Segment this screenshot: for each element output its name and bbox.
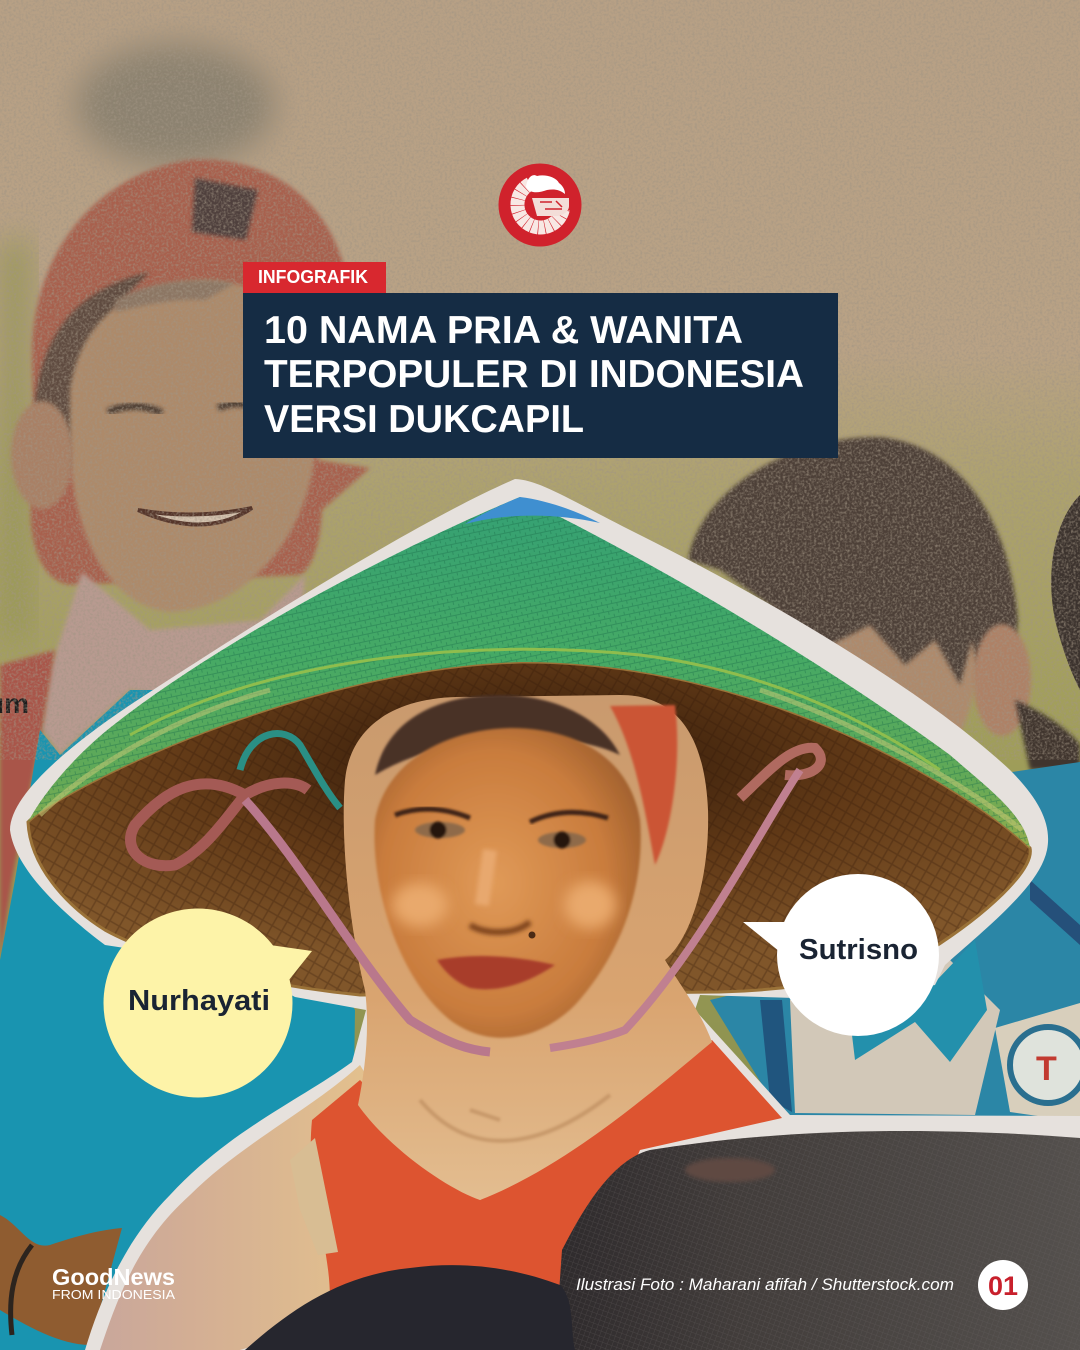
woman: eyebrows bbox=[395, 809, 608, 822]
boy: blue uniform bbox=[0, 690, 355, 1350]
boy: ear bbox=[11, 401, 73, 509]
woman: hat weave texture bbox=[20, 490, 1040, 860]
woman: lace cap bbox=[375, 695, 620, 775]
brand: GoodNews from Indonesia bbox=[52, 1264, 176, 1302]
woman bbox=[20, 490, 1040, 1350]
logo: ring forming letter G bbox=[517, 184, 563, 227]
woman: scarf neck folds bbox=[420, 1095, 610, 1141]
woman: headscarf bbox=[344, 695, 712, 1200]
boy: eyes bbox=[108, 403, 262, 413]
ribbon string right bbox=[550, 770, 800, 1048]
girl: dark strap upper right bbox=[1030, 880, 1080, 945]
logo: G bar pattern bbox=[540, 201, 562, 209]
burlap sack foreground bbox=[245, 1131, 1080, 1350]
speech bubble: Sutrisno bbox=[743, 874, 939, 1036]
logo bbox=[498, 164, 582, 246]
girl: badge letter: T bbox=[1036, 1050, 1057, 1088]
boy: smile with teeth bbox=[138, 508, 252, 525]
sack: grey net bbox=[555, 1131, 1080, 1350]
woman: hat green top bbox=[28, 497, 1030, 848]
ribbon bow right bbox=[740, 748, 821, 798]
second child: dark hair at edge bbox=[1051, 495, 1080, 690]
woman: hat blue tip bbox=[465, 497, 600, 524]
girl: white shirt bbox=[790, 960, 1000, 1115]
boy: wristband bbox=[11, 1245, 32, 1335]
woman: hat underside weave bbox=[28, 662, 1030, 995]
woman: hat underside bbox=[28, 662, 1030, 995]
ribbon bow left bbox=[131, 783, 308, 866]
boy: face bbox=[70, 280, 316, 612]
girl: school badge bbox=[995, 1003, 1080, 1122]
woman: teal ribbon bbox=[240, 734, 340, 808]
title block: 10 NAMA PRIA & WANITA bbox=[264, 309, 743, 352]
woman: pink ribbon left bbox=[131, 783, 490, 1052]
background: green foliage at left bbox=[0, 240, 30, 640]
brand: GoodNews from Indonesia: GoodNews bbox=[52, 1264, 175, 1290]
woman: face bbox=[374, 728, 641, 1038]
title block bbox=[243, 293, 838, 458]
logo: eagle head bbox=[526, 175, 565, 194]
photo grain overlay bbox=[0, 0, 1080, 760]
background: dark tree haze bbox=[75, 43, 275, 167]
girl: badge emblem bbox=[1010, 1027, 1080, 1103]
page number badge: 01 bbox=[988, 1271, 1018, 1301]
logo: red disc bbox=[498, 164, 582, 246]
speech bubble: Nurhayati bbox=[104, 908, 312, 1098]
woman: red inner scarf bbox=[610, 705, 677, 865]
boy: arm bbox=[0, 1215, 122, 1345]
title block: TERPOPULER DI INDONESIA bbox=[264, 353, 804, 396]
girl: dark strap lower left bbox=[760, 1000, 792, 1112]
label: infografik bbox=[243, 262, 386, 293]
background: boy bbox=[0, 160, 370, 1350]
girl: hair with fringe bbox=[688, 437, 1018, 700]
girl: face bbox=[770, 590, 979, 750]
ribbon string left bbox=[245, 800, 490, 1052]
woman: red shirt bbox=[311, 1040, 782, 1300]
girl: blue bow tie bbox=[852, 940, 987, 1062]
girl: ear bbox=[973, 624, 1031, 736]
speech bubble: Nurhayati: Nurhayati bbox=[128, 985, 270, 1017]
woman: ruffled scarf edge bbox=[290, 1138, 338, 1255]
woman: hat rim highlight bbox=[40, 690, 1022, 830]
woman: mole bbox=[528, 932, 536, 938]
woman: hat rim rib bbox=[130, 649, 940, 770]
sack: net texture bbox=[555, 1131, 1080, 1350]
girl: ponytail bbox=[1015, 700, 1080, 770]
speech bubble: Sutrisno: Sutrisno bbox=[799, 934, 918, 966]
woman: shoulder wrap bbox=[100, 1065, 400, 1350]
boy: red cap bbox=[31, 160, 370, 585]
woman: lips bbox=[437, 956, 555, 989]
logo: G bar bbox=[532, 198, 569, 216]
sack: reddish stitching bbox=[685, 1158, 775, 1182]
woman: cheek highlights bbox=[392, 881, 616, 929]
background: girl bbox=[688, 437, 1080, 1130]
boy: collar and shirt bbox=[42, 572, 305, 755]
girl: uniform bbox=[710, 762, 1080, 1130]
boy: cap badge bbox=[192, 178, 258, 240]
boy: forehead strap bbox=[115, 280, 235, 312]
photo credit: Ilustrasi Foto : Maharani afifah / Shutterstock.com bbox=[576, 1275, 954, 1294]
boy: red bag strap bbox=[0, 650, 55, 960]
boy: hair bbox=[35, 272, 150, 470]
white cutout outline of woman and hat bbox=[10, 479, 1080, 1350]
page number badge bbox=[978, 1260, 1028, 1310]
woman: eyes bbox=[415, 822, 586, 848]
woman: nose bbox=[470, 850, 530, 932]
sack: dark navy net bbox=[245, 1265, 575, 1350]
brand: GoodNews from Indonesia: FROM INDONESIA bbox=[52, 1288, 176, 1302]
woman: pink ribbon right bbox=[550, 748, 821, 1048]
label: infografik: INFOGRAFIK bbox=[258, 267, 368, 287]
title block: VERSI DUKCAPIL bbox=[264, 398, 584, 441]
